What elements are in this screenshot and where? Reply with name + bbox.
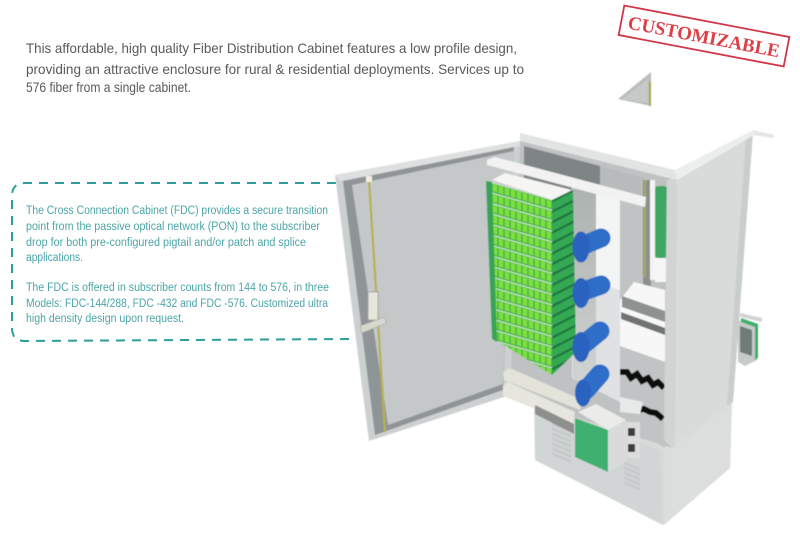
module top <box>492 173 572 200</box>
green splice module <box>486 173 576 375</box>
callout text: high density design upon request. <box>26 313 184 325</box>
intro paragraph <box>26 40 524 95</box>
callout text: point from the passive optical network (PON) to the subscriber <box>26 221 320 233</box>
open cabinet door <box>335 141 520 441</box>
callout text: drop for both pre-configured pigtail and/or patch and splice <box>26 237 306 249</box>
module side <box>552 190 576 375</box>
plinth base <box>534 402 732 525</box>
module front ports <box>492 182 552 375</box>
intro paragraph: providing an attractive enclosure for rural & residential deployments. Services up to <box>26 61 524 77</box>
dashed callout border <box>12 183 352 341</box>
intro paragraph: 576 fiber from a single cabinet. <box>26 79 191 95</box>
spool 4 <box>575 374 600 406</box>
cabinet right side panel <box>664 132 753 448</box>
small cabinet thumbnail triangle <box>618 72 651 106</box>
rail bars <box>503 368 582 434</box>
door earth wire <box>360 176 386 432</box>
intro paragraph: This affordable, high quality Fiber Distribution Cabinet features a low profile design, <box>26 40 517 56</box>
green inner strip <box>645 180 667 282</box>
cabinet illustration <box>335 130 774 525</box>
lower green splice box <box>575 404 640 472</box>
callout: FDC description <box>12 183 352 341</box>
callout text: The FDC is offered in subscriber counts from 144 to 576, in three <box>26 282 329 294</box>
callout text: Models: FDC-144/288, FDC -432 and FDC -576. Customized ultra <box>26 298 329 310</box>
white centre panel <box>572 180 620 402</box>
cabinet interior <box>505 140 677 448</box>
right rack with cable ports <box>620 282 665 448</box>
spool 1 <box>572 232 601 262</box>
callout text: The Cross Connection Cabinet (FDC) provides a secure transition <box>26 205 328 217</box>
cabinet roof <box>520 130 774 180</box>
callout text: applications. <box>26 252 83 264</box>
spool 2 <box>572 278 601 308</box>
rear white mounting bar <box>487 157 646 207</box>
callout text <box>26 205 329 325</box>
stamp: customizable: CUSTOMIZABLE <box>626 13 781 62</box>
blue fiber spools <box>572 232 601 406</box>
spool 3 <box>572 331 600 362</box>
right far-side green module <box>738 313 762 366</box>
